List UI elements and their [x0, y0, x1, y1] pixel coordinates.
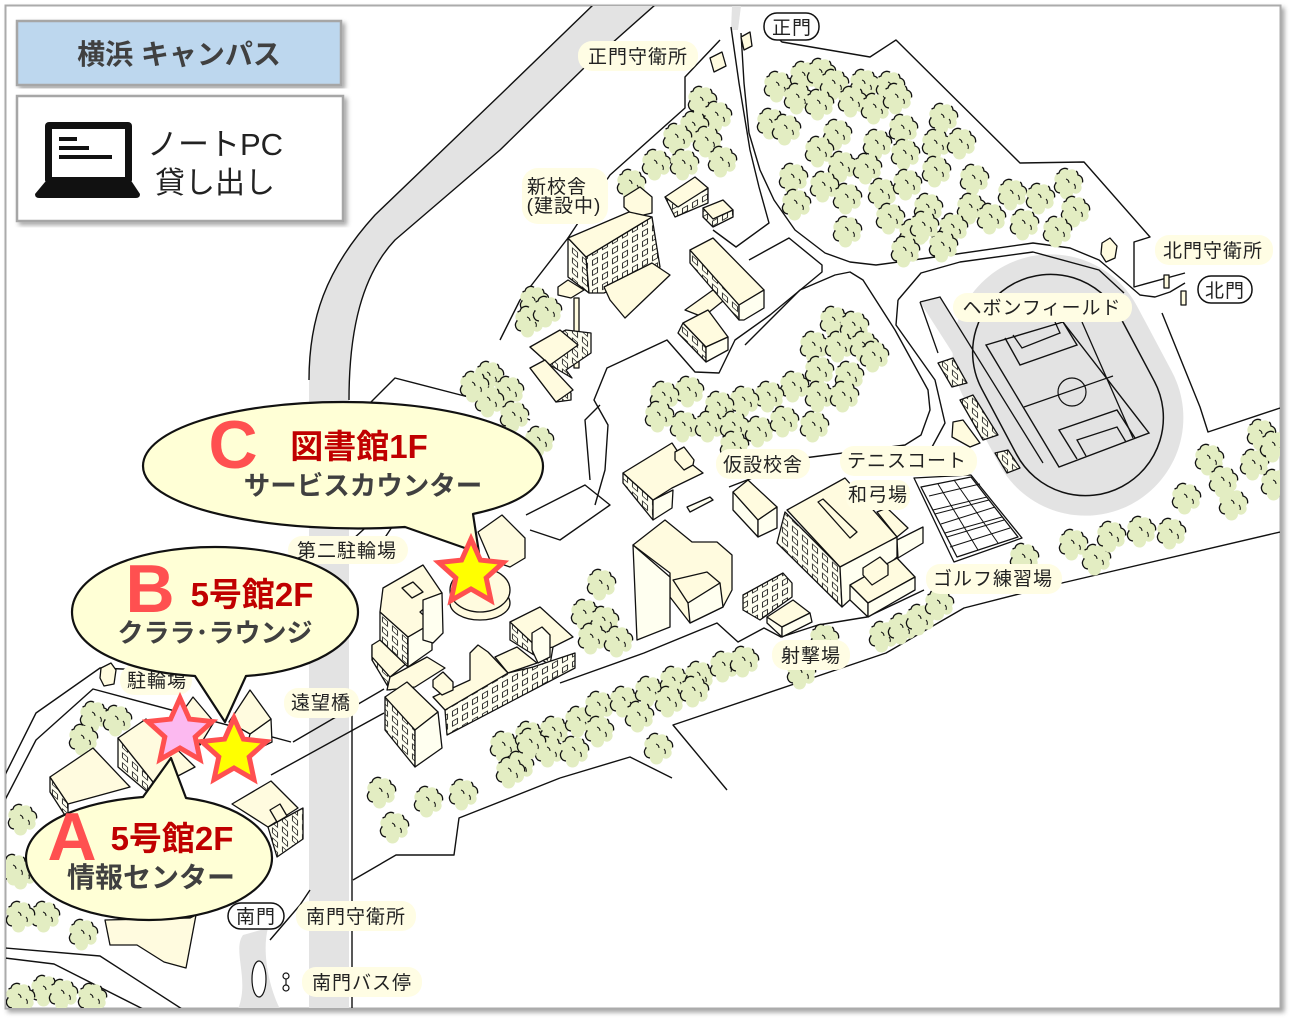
athletics field: [919, 254, 1184, 516]
title panel: [17, 21, 341, 85]
icon: laptop: [35, 122, 140, 198]
label: south gate bus stop: [302, 967, 422, 997]
laptop rental panel: [17, 96, 343, 221]
star: yellow C: [439, 539, 503, 600]
building: building 6: [372, 565, 445, 690]
stands: [938, 358, 1020, 473]
callout A: 情報センター: [67, 862, 235, 893]
label: north gate guardhouse: [1155, 235, 1273, 265]
label: viewing bridge: 遠望橋: [291, 692, 351, 714]
label: north gate guardhouse: 北門守衛所: [1163, 240, 1263, 262]
roundabout: [252, 961, 266, 997]
callout B: クララ･ラウンジ: [117, 618, 313, 648]
buildings: central north: [623, 443, 713, 520]
buildings: south-west: [50, 690, 303, 968]
title panel: 横浜 キャンパス: [77, 39, 281, 70]
building: temporary school: [733, 480, 777, 537]
callout B: 5号館2F: [191, 576, 313, 613]
star: pink A: [148, 698, 212, 760]
label: south gate: 南門: [236, 906, 276, 928]
north gate road: [731, 6, 741, 30]
label: new school building: (建設中): [527, 195, 601, 217]
label: temporary school: [716, 449, 810, 479]
building: central tower: [633, 520, 732, 640]
bus stop: [283, 973, 289, 991]
label: second bicycle parking: 第二駐輪場: [297, 540, 397, 562]
label: south gate guardhouse: [296, 901, 416, 931]
label: main gate guardhouse: 正門守衛所: [588, 46, 688, 68]
callout A: [26, 758, 272, 920]
label: viewing bridge: [284, 688, 359, 718]
tennis courts: [914, 475, 1022, 562]
callout C: C: [208, 407, 258, 483]
label: hepburn field: [953, 293, 1132, 322]
label: shooting range: 射撃場: [781, 645, 841, 667]
label: shooting range: [772, 640, 850, 670]
label: south gate: [228, 903, 284, 929]
label: golf range: [926, 564, 1062, 594]
label: golf range: ゴルフ練習場: [933, 568, 1053, 590]
label: archery hall: 和弓場: [848, 484, 908, 506]
label: second bicycle parking: [288, 536, 408, 564]
small guard boxes: [100, 32, 1186, 686]
building: long lecture wing: [385, 607, 575, 767]
callout C: [143, 402, 543, 553]
label: archery hall: [846, 480, 910, 510]
building: long east block: [678, 238, 764, 362]
laptop rental panel: 貸し出し: [155, 167, 275, 200]
west road: [309, 5, 655, 1009]
callout C: サービスカウンター: [244, 471, 482, 501]
label: new school building: 新校舎: [527, 176, 587, 198]
label: main gate guardhouse: [578, 41, 698, 71]
building: shooting range blocks: [743, 573, 812, 637]
label: hepburn field: ヘボンフィールド: [962, 297, 1122, 319]
buildings: north blocks: [665, 177, 733, 227]
label: south gate bus stop: 南門バス停: [312, 972, 412, 994]
label: main gate: 正門: [772, 18, 812, 39]
callout C: 図書館1F: [290, 428, 428, 465]
label: north gate: [1198, 276, 1252, 303]
building: archery hall: [777, 478, 923, 617]
label: north gate: 北門: [1205, 280, 1245, 302]
callout B: [72, 547, 358, 722]
label: bicycle parking: [120, 665, 192, 695]
callout B: B: [125, 551, 175, 627]
callout A: 5号館2F: [111, 820, 233, 857]
label: tennis court: テニスコート: [847, 451, 967, 472]
label: temporary school: 仮設校舎: [723, 454, 803, 476]
callout A: A: [47, 799, 97, 875]
label: tennis court: [840, 446, 977, 476]
building: new school: [558, 187, 670, 368]
star: yellow B: [202, 718, 266, 780]
label: new school building: [522, 168, 608, 224]
south gate road: [238, 928, 280, 1009]
buildings: west small blocks: [530, 330, 591, 402]
label: bicycle parking: 駐輪場: [127, 670, 187, 692]
building: library rotunda: [450, 515, 525, 620]
laptop rental panel: ノートPC: [147, 127, 283, 162]
label: south gate guardhouse: 南門守衛所: [306, 906, 406, 928]
label: main gate: [764, 13, 819, 40]
